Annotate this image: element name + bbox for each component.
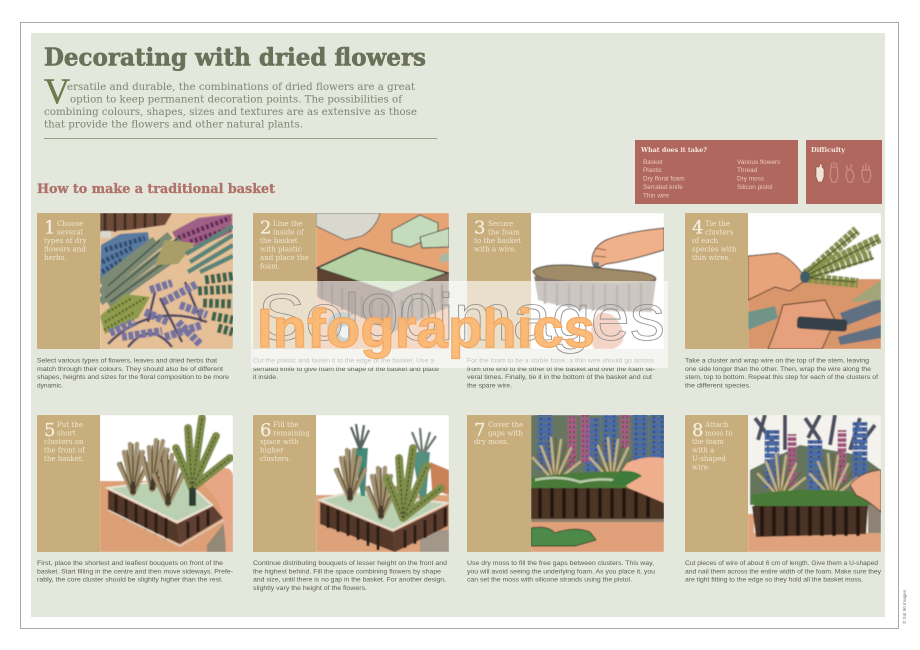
step 7 label: dry moss.	[474, 437, 509, 446]
step 1 label	[44, 219, 87, 262]
step 1 label: herbs.	[44, 253, 67, 262]
step 3	[467, 213, 664, 389]
intro line 1: ersatile and durable, the combinations of dried flowers are a great	[67, 81, 416, 93]
step 4 illustration: tying wire	[748, 213, 881, 349]
step 8 label: the foam	[692, 437, 724, 446]
step 4 caption: one side longer than the other. Then, wrap the wire along the	[685, 366, 871, 373]
step 2 number: 2	[260, 218, 271, 238]
step 7 label	[474, 420, 523, 446]
credit: © Sol 90 Images	[901, 589, 907, 624]
step 1 label: types of dry	[44, 236, 87, 245]
step 1 caption: dynamic.	[37, 382, 63, 389]
title: Decorating with dried flowers	[44, 42, 426, 72]
step 6 label: space with	[260, 437, 299, 446]
step 5 number: 5	[44, 420, 55, 441]
intro line 3: combining colours, shapes, sizes and textures are as extensive as those	[44, 106, 417, 118]
step 3 caption	[467, 358, 655, 389]
panel: what does it take: Serrated knife	[643, 184, 683, 191]
step 4 label	[692, 219, 737, 262]
step 5 caption: First, place the shortest and leafiest bouquets on front of the	[37, 560, 223, 567]
step 1 caption: match through their colours. They should also be of different	[37, 366, 223, 373]
step 3 label: to the basket	[474, 236, 521, 245]
step 6	[253, 415, 449, 592]
icon: hand active	[816, 164, 824, 182]
step 8 caption: are tight fitting to the edge so they hold all the basket moss.	[685, 577, 863, 584]
step 2 label: the basket	[260, 236, 298, 245]
step 7 number: 7	[474, 420, 485, 441]
icon: hand 4	[862, 163, 871, 182]
step 4 label: species with	[692, 244, 737, 254]
step 1 label: several	[57, 228, 84, 236]
step 6 caption: slightly vary the height of the flowers.	[253, 585, 367, 592]
step 2 label: with plastic	[260, 244, 302, 254]
step 6 label: clusters.	[260, 454, 291, 463]
intro line 2: option to keep permanent decoration points. The possibilities of	[70, 94, 403, 106]
step 3 number: 3	[474, 218, 485, 238]
step 6 label: higher	[260, 446, 284, 454]
step 3 label: the foam	[488, 228, 520, 236]
panel: what does it take: Dry floral foam	[643, 176, 685, 182]
step 4 label: of each	[692, 236, 719, 245]
step 6 label: remaining	[273, 428, 310, 438]
step 5 label: the front of	[44, 446, 86, 454]
step 3 label box	[467, 213, 531, 349]
step 8 label: wire.	[692, 462, 710, 472]
step 3 label	[474, 219, 521, 254]
step 7 label: Cover the	[488, 420, 523, 429]
step 4 label box	[685, 213, 748, 349]
step 8 label: U-shaped	[692, 454, 726, 463]
step 6 caption: the highest behind. Fill the space combining flowers by shape	[253, 568, 441, 575]
step 2 label: inside of	[273, 228, 305, 236]
watermark: infographics: Infographics	[257, 297, 595, 359]
step 1 label: Choose	[57, 219, 83, 228]
step 4 label: clusters	[705, 228, 734, 236]
step 5 caption: rably, the core cluster should be slightly higher than the rest.	[37, 577, 223, 584]
step 4 caption: Take a cluster and wrap wire on the top of the stem, leaving	[685, 358, 869, 364]
step 5 label: Put the	[57, 420, 83, 429]
drop cap: V	[44, 71, 70, 111]
icon: hand 3	[846, 164, 854, 182]
panel: what does it take: Dry moss	[737, 176, 764, 182]
step 2 caption	[253, 358, 439, 381]
step 7 caption	[467, 560, 655, 584]
step 8 caption	[685, 560, 882, 584]
step 8 label: with a	[692, 446, 715, 454]
step 2 caption: Cut the plastic and fasten it to the edge of the basket. Use a	[253, 358, 434, 364]
panel: what does it take: Thread	[737, 167, 758, 174]
step 6 label: Fill the	[273, 420, 299, 429]
step 7 caption: Use dry moss to fill the free gaps between clusters. This way,	[467, 560, 654, 567]
step 1	[37, 213, 233, 389]
step 3 caption: from one end to the other of the basket and over the foam se-	[467, 366, 655, 373]
step 6 number: 6	[260, 420, 271, 441]
step 6 caption: Continue distributing bouquets of lesser height on the front and	[253, 560, 447, 567]
watermark: agency name: Sol90images	[258, 280, 665, 354]
panel: what does it take: Basket	[643, 159, 663, 166]
step 8 label box	[685, 415, 748, 552]
step 1 caption: shapes, heights and sizes for the floral composition to be more	[37, 374, 229, 381]
panel: what does it take	[635, 140, 798, 204]
step 5 label: clusters on	[44, 437, 84, 446]
step 2 label: and place the	[260, 253, 309, 262]
step 4 caption	[685, 358, 878, 389]
panel: difficulty	[806, 140, 882, 204]
panel: what does it take: What does it take?	[640, 147, 707, 154]
step 3 caption: veral times. Finally, tie it in the bottom of the basket and cut	[467, 374, 652, 381]
watermark overlay	[251, 280, 668, 368]
heading: how to make a traditional basket: How to make a traditional basket	[37, 182, 275, 197]
intro text block	[44, 71, 417, 130]
step 6 illustration: taller clusters	[316, 415, 449, 552]
step 2 illustration: foam and tray	[316, 213, 449, 349]
step 4 caption: stem, top to bottom. Repeat this step for each of the clusters of	[685, 374, 878, 381]
step 3 label: Secure	[488, 219, 513, 228]
panel: what does it take: Plastic	[643, 167, 663, 174]
step 1 number: 1	[44, 218, 55, 238]
step 7 label: gaps with	[488, 428, 523, 438]
step 5 label	[44, 420, 86, 463]
step 2 label: foam.	[260, 262, 280, 270]
step 1 label: flowers and	[44, 244, 86, 254]
step 7 label box	[467, 415, 531, 552]
step 7	[467, 415, 664, 583]
step 6 label box	[253, 415, 316, 552]
step 3 caption: For the foam to be a stable base, a thin wire should go across	[467, 358, 654, 364]
step 2 caption: it inside.	[253, 374, 278, 381]
step 8 number: 8	[692, 420, 703, 441]
step 4 label: Tie the	[705, 219, 730, 228]
panel: difficulty: Difficulty	[811, 147, 845, 154]
step 5 illustration: short clusters in basket	[100, 415, 233, 552]
step 1 caption: Select various types of flowers, leaves and dried herbs that	[37, 358, 217, 364]
step 1 caption	[37, 358, 229, 389]
step 8 caption: and nail them across the entire width of the foam. Make sure they	[685, 568, 882, 575]
step 5	[37, 415, 233, 584]
step 2 label: Line the	[273, 219, 303, 228]
step 2 caption: serrated knife to give foam the shape of the basket and place	[253, 366, 439, 373]
step 4 caption: the different species.	[685, 382, 751, 389]
step 4	[685, 213, 881, 389]
step 3 caption: the spare wire.	[467, 382, 512, 389]
step 1 illustration: assorted flowers	[100, 213, 233, 349]
step 3 label: with a wire.	[474, 244, 517, 254]
step 8 label: Attach	[704, 420, 729, 429]
step 5 label: short	[57, 428, 76, 438]
step 4 label: thin wires.	[692, 253, 730, 262]
step 5 caption	[37, 560, 233, 584]
step 2	[253, 213, 449, 381]
step 7 caption: you will avoid seeing the underlying foam. As you place it, you	[467, 568, 655, 575]
step 2 label	[260, 219, 309, 270]
panel: what does it take: Various flowers	[737, 159, 780, 166]
step 7 illustration: moss	[531, 415, 664, 552]
step 7 caption: can set the moss with silicone strands using the pistol.	[467, 577, 632, 584]
step 6 caption: and size, until there is no gap in the basket. For another design,	[253, 577, 446, 584]
step 5 caption: basket. Start filling in the centre and then move sideways. Prefe-	[37, 568, 233, 575]
step 6 caption	[253, 560, 447, 592]
step 6 label	[260, 420, 310, 463]
panel: what does it take: Thin wire	[643, 192, 669, 200]
step 8	[685, 415, 882, 584]
step 4 number: 4	[692, 218, 703, 238]
step 8 label	[692, 420, 733, 472]
step 2 label box	[253, 213, 316, 349]
step 5 label: the basket.	[44, 454, 84, 463]
step 3 illustration: hand and basket	[531, 213, 664, 349]
step 1 label box	[37, 213, 100, 349]
step 8 label: moss to	[705, 428, 733, 438]
step 5 label box	[37, 415, 100, 552]
step 8 illustration: finished basket	[748, 415, 881, 552]
panel: what does it take: Silicon pistol	[737, 184, 773, 191]
intro line 4: that provide the flowers and other natural plants.	[44, 118, 303, 130]
step 8 caption: Cut pieces of wire of about 6 cm of length. Give them a U-shaped	[685, 560, 878, 567]
icon: hand 2	[830, 162, 838, 182]
